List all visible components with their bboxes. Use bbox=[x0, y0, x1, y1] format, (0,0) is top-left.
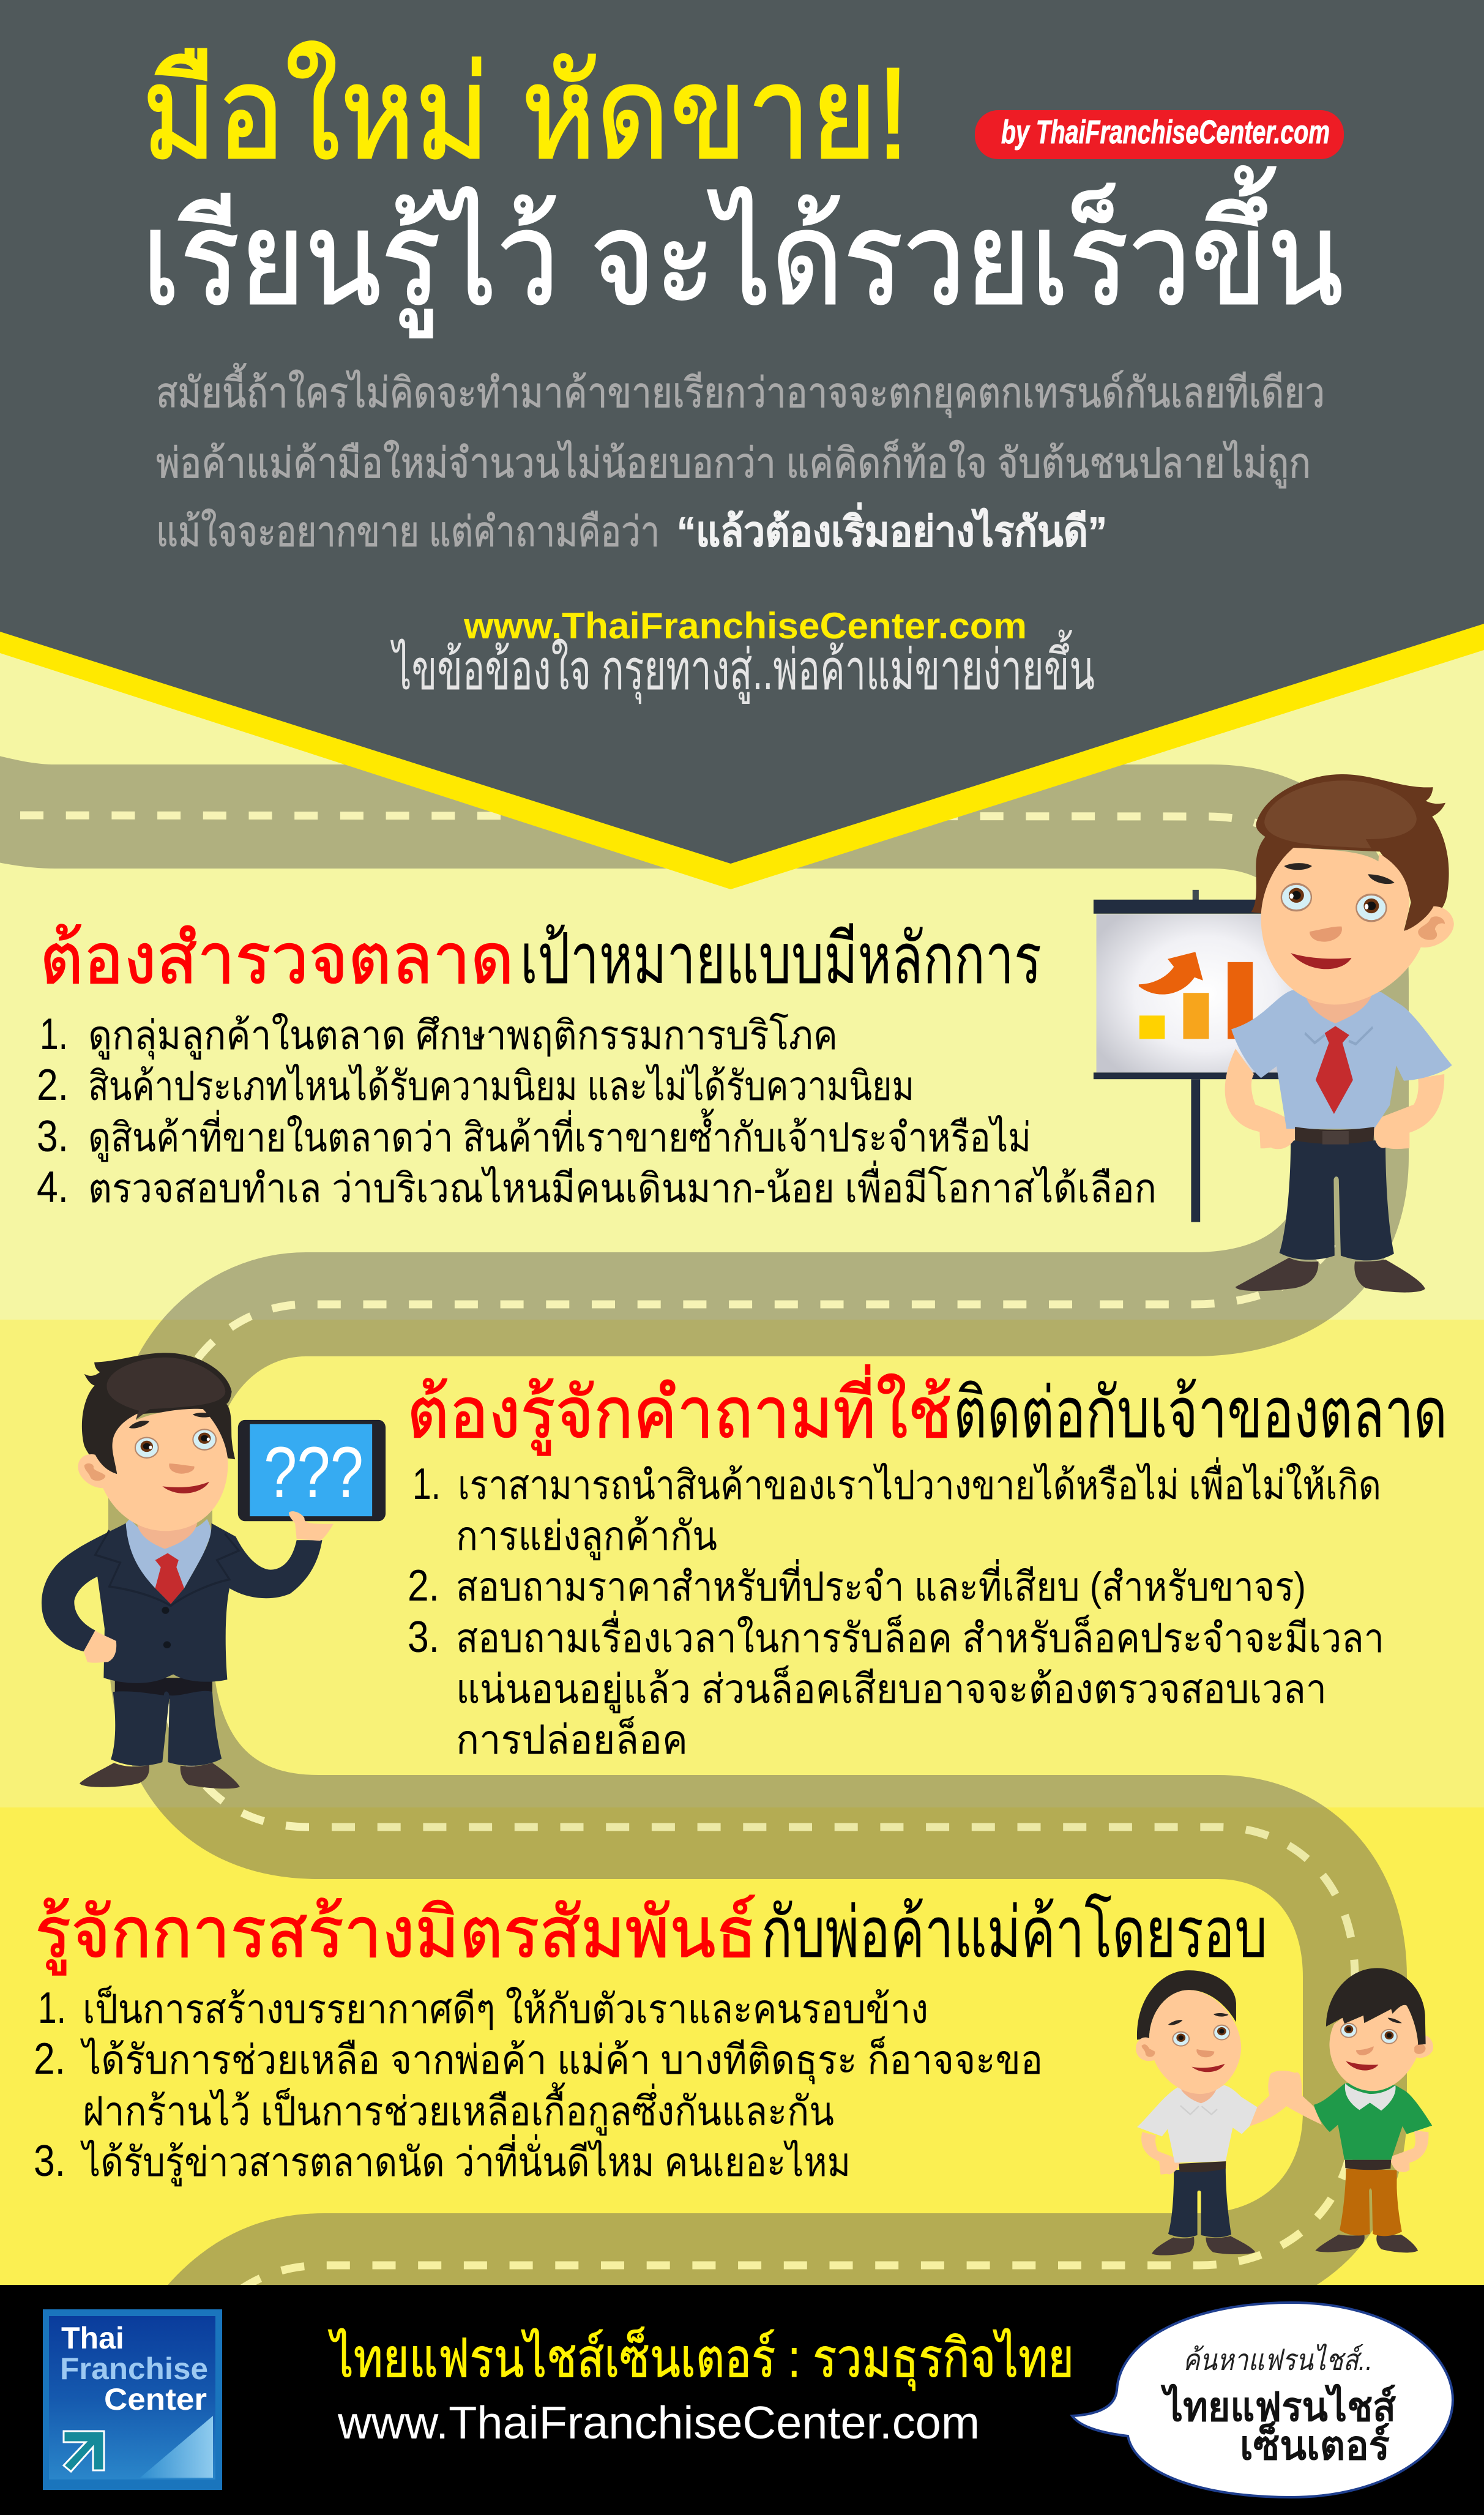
speech bubble: ไทยแฟรนไชส์ bbox=[1160, 2383, 1396, 2429]
section 3 list: 2. bbox=[34, 2035, 65, 2083]
character: man in suit holding tablet bbox=[42, 1353, 386, 1788]
intro paragraph: พ่อค้าแม่ค้ามือใหม่จำนวนไม่น้อยบอกว่า แค่คิดก็ท้อใจ จับต้นชนปลายไม่ถูก bbox=[156, 439, 1311, 488]
section 3 list bbox=[34, 1984, 1043, 2187]
logo: Thai Franchise Center: Center bbox=[104, 2382, 207, 2416]
speech bubble bbox=[1072, 2303, 1453, 2497]
footer bar bbox=[0, 2285, 1484, 2515]
section 3 list: ฝากร้านไว้ เป็นการช่วยเหลือเกื้อกูลซึ่งกันและกัน bbox=[83, 2082, 834, 2136]
section 3 list: เป็นการสร้างบรรยากาศดีๆ ให้กับตัวเราและคนรอบข้าง bbox=[83, 1985, 928, 2031]
section 2 list: สอบถามเรื่องเวลาในการรับล็อค สำหรับล็อคประจำจะมีเวลา bbox=[456, 1610, 1384, 1661]
section 3 heading: รู้จักการสร้างมิตรสัมพันธ์ bbox=[35, 1894, 757, 1975]
website URL: www.ThaiFranchiseCenter.com bbox=[463, 605, 1027, 646]
section 1 heading: เป้าหมายแบบมีหลักการ bbox=[520, 920, 1042, 998]
tablet question marks: ??? bbox=[264, 1432, 364, 1513]
background: section 3 panel bbox=[0, 1807, 1484, 2285]
section 1 heading: ต้องสำรวจตลาด bbox=[40, 920, 514, 998]
character: presenter man bbox=[1225, 774, 1454, 1293]
man in white shirt bbox=[1136, 1970, 1258, 2255]
section 1 list: สินค้าประเภทไหนได้รับความนิยม และไม่ได้รับความนิยม bbox=[88, 1063, 914, 1108]
badge: by ThaiFranchiseCenter.com: by ThaiFranchiseCenter.com bbox=[1001, 114, 1330, 151]
section 1 list: 4. bbox=[37, 1163, 69, 1212]
section 3 list: 1. bbox=[38, 1984, 66, 2033]
section 2 list: การแย่งลูกค้ากัน bbox=[456, 1513, 717, 1561]
footer headline: ไทยแฟรนไชส์เซ็นเตอร์ : รวมธุรกิจไทย bbox=[328, 2326, 1074, 2391]
presentation board with chart bbox=[1094, 890, 1294, 1222]
section 2 list: แน่นอนอยู่แล้ว ส่วนล็อคเสียบอาจจะต้องตรวจสอบเวลา bbox=[456, 1665, 1327, 1714]
intro paragraph bbox=[156, 363, 1325, 555]
section 1 list: ตรวจสอบทำเล ว่าบริเวณไหนมีคนเดินมาก-น้อย เพื่อมีโอกาสได้เลือก bbox=[88, 1160, 1157, 1211]
intro paragraph: สมัยนี้ถ้าใครไม่คิดจะทำมาค้าขายเรียกว่าอาจจะตกยุคตกเทรนด์กันเลยทีเดียว bbox=[156, 363, 1325, 418]
section 3 list: ได้รับการช่วยเหลือ จากพ่อค้า แม่ค้า บางทีติดธุระ ก็อาจจะขอ bbox=[80, 2036, 1043, 2085]
section 2 list: สอบถามราคาสำหรับที่ประจำ และที่เสียบ (สำหรับขาจร) bbox=[456, 1559, 1306, 1609]
logo: Thai Franchise Center: Thai bbox=[61, 2321, 124, 2355]
section 2 heading: ต้องรู้จักคำถามที่ใช้ bbox=[407, 1365, 952, 1456]
badge: by ThaiFranchiseCenter.com bbox=[975, 110, 1344, 159]
section 3 heading bbox=[35, 1893, 1267, 1975]
section 1 heading bbox=[40, 920, 1042, 998]
section 2 list: 3. bbox=[408, 1613, 439, 1662]
characters: two men shaking hands bbox=[1136, 1968, 1433, 2255]
section 2 heading bbox=[407, 1365, 1447, 1456]
title line 1: มือใหม่ หัดขาย! bbox=[142, 40, 909, 185]
intro paragraph: “แล้วต้องเริ่มอย่างไรกันดี” bbox=[677, 502, 1107, 555]
section 1 list bbox=[37, 1010, 1157, 1212]
section 1 list: 1. bbox=[40, 1010, 68, 1059]
section 3 list: ได้รับรู้ข่าวสารตลาดนัด ว่าที่นั่นดีไหม คนเยอะไหม bbox=[80, 2134, 851, 2187]
section 1 list: 2. bbox=[37, 1061, 69, 1110]
section 3 list: 3. bbox=[34, 2137, 65, 2186]
man in green shirt bbox=[1314, 1968, 1433, 2252]
tagline: ไขข้อข้องใจ กรุยทางสู่..พ่อค้าแม่ขายง่ายขึ้น bbox=[390, 629, 1095, 704]
footer URL: www.ThaiFranchiseCenter.com bbox=[337, 2397, 980, 2448]
section 2 list: 1. bbox=[412, 1460, 441, 1509]
section 2 list bbox=[408, 1457, 1384, 1762]
section 1 list: 3. bbox=[37, 1112, 69, 1161]
section 1 list: ดูกลุ่มลูกค้าในตลาด ศึกษาพฤติกรรมการบริโภค bbox=[88, 1012, 838, 1060]
section 3 heading: กับพ่อค้าแม่ค้าโดยรอบ bbox=[761, 1893, 1267, 1972]
background: section 2 panel bbox=[0, 1320, 1484, 1807]
section 2 list: 2. bbox=[408, 1561, 439, 1610]
clasped hands bbox=[1250, 2071, 1322, 2126]
intro paragraph: แม้ใจจะอยากขาย แต่คำถามคือว่า bbox=[156, 508, 660, 555]
section 1 list: ดูสินค้าที่ขายในตลาดว่า สินค้าที่เราขายซ้ำกับเจ้าประจำหรือไม่ bbox=[88, 1108, 1031, 1162]
speech bubble: เซ็นเตอร์ bbox=[1240, 2421, 1390, 2468]
winding road bbox=[0, 793, 1357, 2350]
logo: Thai Franchise Center: Franchise bbox=[60, 2352, 208, 2386]
background: section 1 panel bbox=[0, 612, 1484, 1320]
header chevron bbox=[0, 0, 1484, 889]
speech bubble: ค้นหาแฟรนไชส์.. bbox=[1183, 2343, 1373, 2377]
logo: Thai Franchise Center bbox=[43, 2309, 222, 2490]
section 2 list: การปล่อยล็อค bbox=[456, 1716, 688, 1762]
